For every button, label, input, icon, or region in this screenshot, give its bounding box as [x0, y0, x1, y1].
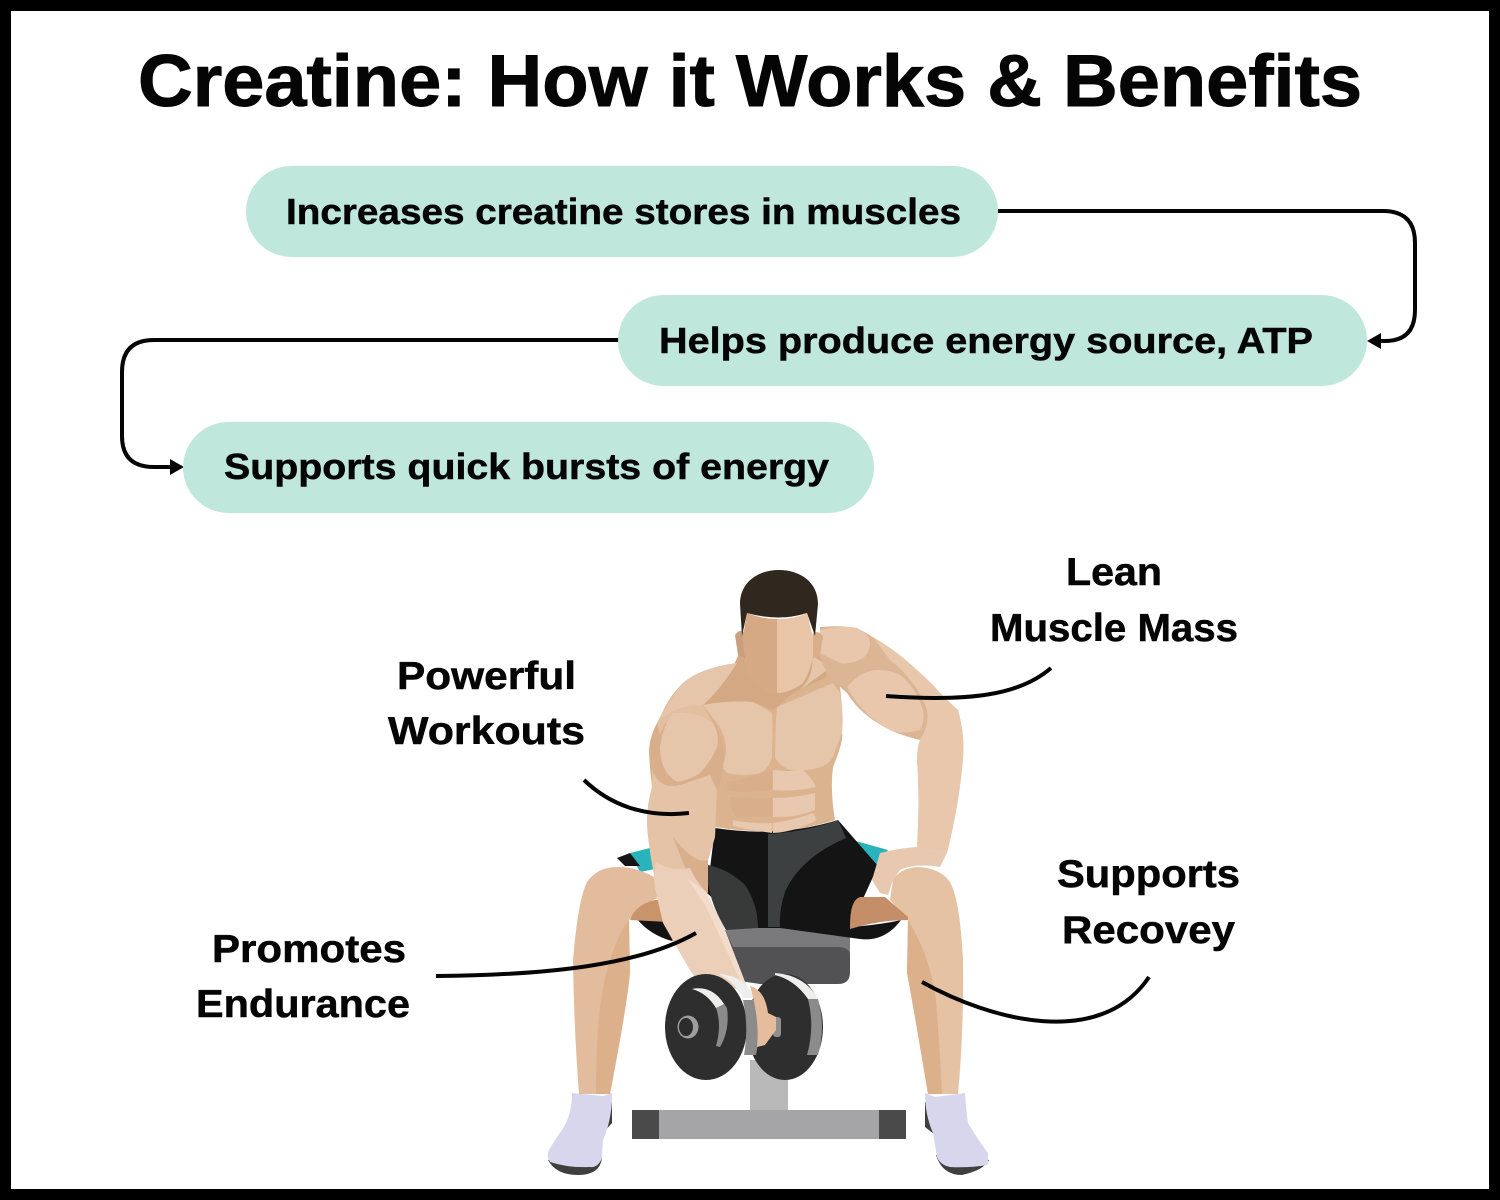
torso [654, 640, 843, 850]
forearm [654, 862, 750, 990]
label: Supports Recovey: Supports [1057, 853, 1240, 896]
label: Promotes Endurance: Promotes [212, 928, 406, 971]
label: Promotes Endurance [196, 928, 696, 1026]
right chest muscle [775, 683, 843, 771]
step 1 pill: Increases creatine stores in muscles [286, 191, 961, 232]
right arm [820, 626, 963, 895]
label: Supports Recovey: Recovey [1062, 909, 1235, 952]
shoes [548, 1093, 989, 1175]
panel: process flow [122, 166, 1415, 513]
abdominal muscles [727, 770, 772, 792]
right hand [872, 847, 947, 895]
shorts [617, 820, 901, 941]
head [735, 570, 823, 693]
bench [632, 925, 906, 1139]
step 2 pill: Helps produce energy source, ATP [659, 320, 1313, 361]
arrow: step 2 to step 3 [122, 340, 620, 475]
label: Powerful Workouts: Workouts [388, 710, 585, 753]
left arm [647, 705, 724, 893]
label: Powerful Workouts [388, 655, 689, 814]
label: Lean Muscle Mass: Lean [1066, 551, 1162, 594]
label: Lean Muscle Mass: Muscle Mass [990, 607, 1238, 650]
illustration: seated man with dumbbell [548, 570, 989, 1175]
step 3 pill: Supports quick bursts of energy [224, 446, 829, 487]
label: Powerful Workouts: Powerful [397, 655, 576, 698]
left chest muscle [703, 701, 772, 775]
step 1 pill [246, 166, 998, 257]
label: Lean Muscle Mass [886, 551, 1238, 698]
step 2 pill [618, 295, 1367, 386]
label: Promotes Endurance: Endurance [196, 983, 410, 1026]
title: Creatine: How it Works & Benefits [138, 41, 1362, 122]
neck and collarbone shading [703, 640, 827, 710]
step 3 pill [183, 422, 874, 513]
legs [573, 867, 963, 1094]
hand on bar [750, 986, 781, 1047]
arrow: step 1 to step 2 [998, 211, 1415, 349]
label: Supports Recovey [922, 853, 1240, 1022]
dumbbell [665, 973, 823, 1080]
